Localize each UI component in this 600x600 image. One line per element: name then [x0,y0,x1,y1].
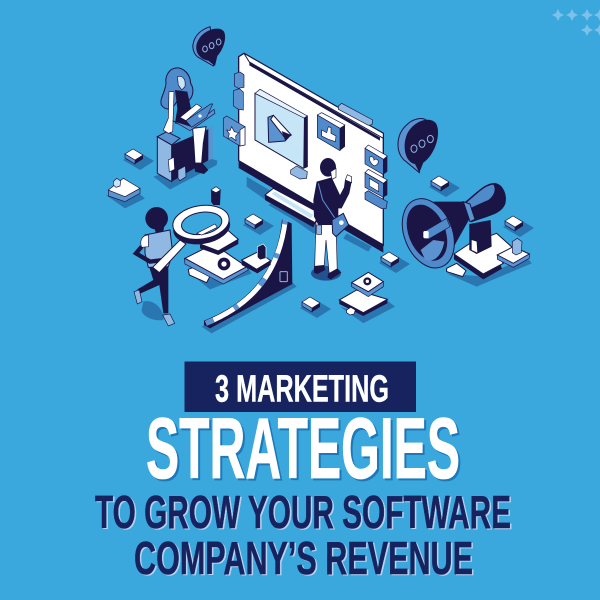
curved growth ramp [202,219,297,333]
banner [184,362,416,412]
gear platforms [184,231,271,289]
megaphone on platform [393,183,532,287]
decorative sparkles [552,9,600,36]
isometric illustration [106,27,534,333]
laptop [173,104,215,131]
bottom-left block [106,178,221,208]
seat box [157,125,213,182]
man carrying a bag [311,158,372,281]
floating cubes [123,149,534,318]
headline [146,401,462,499]
speech bubble left [193,27,225,66]
mail tile [365,169,387,197]
monitor video panel [255,89,307,179]
woman with laptop [153,68,217,189]
monitor [223,53,383,253]
monitor stand [265,188,323,233]
gear block stack [339,272,395,323]
person with magnifying glass [134,201,233,326]
monitor icons [311,103,532,323]
magnifying glass [153,201,233,273]
banner text: 3 MARKETING [215,368,389,410]
speech bubble right [398,119,438,173]
heart tile [365,145,387,175]
side tabs and star tile [223,72,245,146]
thumbs up tile [317,113,345,151]
